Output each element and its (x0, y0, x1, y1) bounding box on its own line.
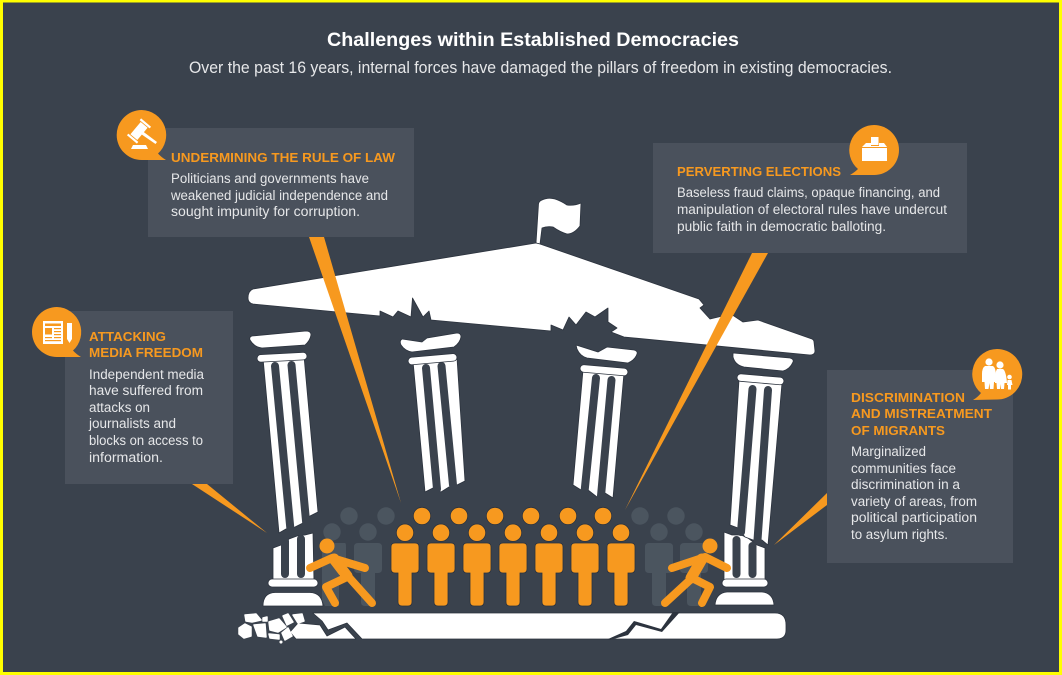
column 4 (715, 353, 793, 605)
body text: have suffered from (89, 383, 203, 398)
column 1 (250, 331, 323, 606)
panel: undermining the rule of law (117, 110, 414, 237)
panel: discrimination and mistreatment of migrants (827, 349, 1022, 563)
body text: Independent media (89, 367, 204, 382)
icon: newspaper (32, 307, 81, 357)
illustration: broken temple (239, 198, 815, 643)
panel: attacking media freedom (32, 307, 233, 484)
rubble (239, 614, 304, 643)
body text (677, 185, 947, 234)
body text (88, 367, 204, 465)
body text: Politicians and governments have (171, 171, 369, 186)
roof (248, 243, 815, 355)
heading: MEDIA FREEDOM (89, 345, 203, 360)
subtitle: Over the past 16 years, internal forces have damaged the pillars of freedom in existing democracies. (189, 59, 892, 77)
body text (851, 444, 977, 542)
flag (536, 198, 581, 244)
crowd: faded people (322, 507, 708, 606)
heading (89, 329, 203, 360)
title: Challenges within Established Democracies (327, 29, 739, 51)
icon: gavel (117, 110, 166, 160)
icon: family (972, 349, 1022, 400)
body text: discrimination in a (851, 477, 960, 492)
body text: to asylum rights. (851, 527, 948, 542)
body text: public faith in democratic balloting. (677, 219, 886, 234)
body text: attacks on (89, 400, 150, 415)
heading (851, 390, 992, 438)
heading: PERVERTING ELECTIONS (677, 164, 841, 179)
body text: variety of areas, from (851, 494, 977, 509)
body text: Marginalized (851, 444, 926, 459)
arrow: migrants ray (774, 493, 827, 545)
body text: political participation (851, 510, 977, 525)
column 2 (400, 333, 465, 492)
figure: left runner pushing column (310, 538, 372, 603)
arrow: elections ray (625, 253, 768, 510)
figure: right runner pushing column (665, 538, 727, 603)
body text: weakened judicial independence and (170, 188, 388, 203)
heading: DISCRIMINATION (851, 390, 965, 405)
icon: ballot box (849, 125, 899, 175)
heading: ATTACKING (89, 329, 166, 344)
crowd: orange people (391, 507, 635, 606)
body text: manipulation of electoral rules have undercut (677, 202, 947, 217)
temple floor with cracks (290, 612, 786, 640)
body text: communities face (851, 461, 956, 476)
arrow: media ray (192, 484, 267, 533)
body text: blocks on access to (89, 433, 203, 448)
column 3 (573, 345, 637, 498)
heading: OF MIGRANTS (851, 423, 945, 438)
body text: sought impunity for corruption. (171, 204, 360, 219)
body text: information. (89, 450, 163, 465)
body text: Baseless fraud claims, opaque financing, and (677, 185, 940, 200)
body text (170, 171, 388, 219)
arrow: rule of law ray (309, 237, 401, 503)
heading: AND MISTREATMENT (851, 406, 992, 421)
panel: perverting elections (653, 125, 967, 253)
heading: UNDERMINING THE RULE OF LAW (171, 150, 396, 165)
body text: journalists and (88, 416, 176, 431)
